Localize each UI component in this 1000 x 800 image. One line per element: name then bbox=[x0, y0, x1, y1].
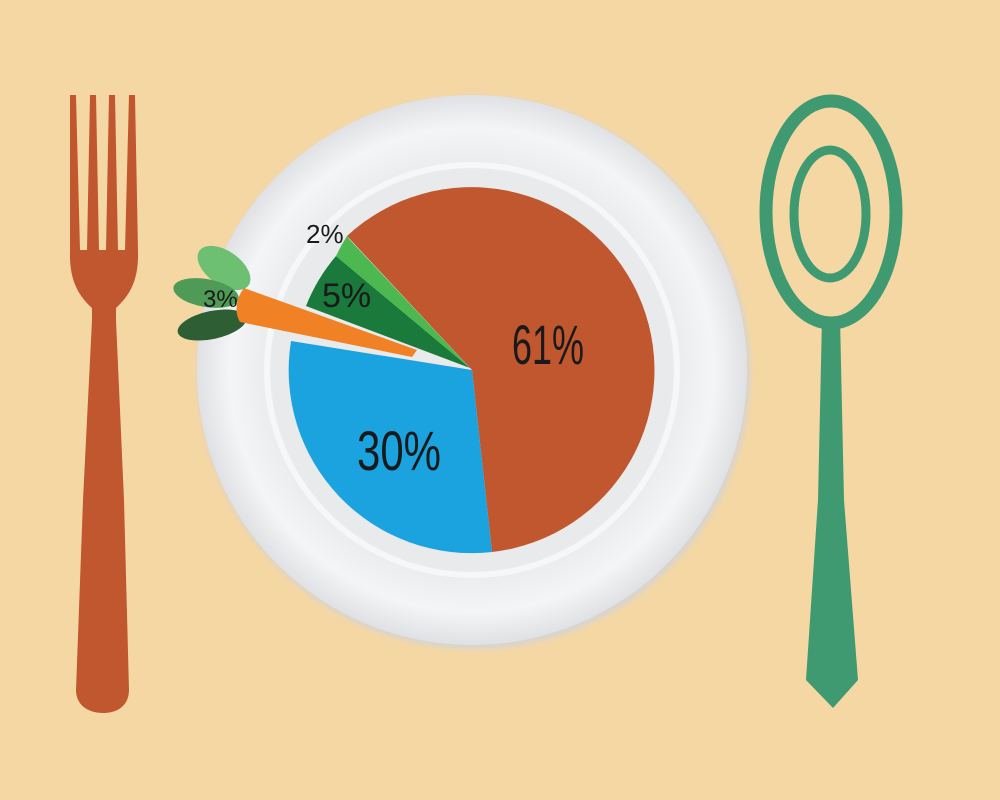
slice: 2% bbox=[336, 236, 470, 368]
carrot slice: 3% bbox=[171, 237, 417, 357]
slice: 61% bbox=[347, 187, 654, 552]
label: 61%: 61% bbox=[512, 313, 584, 376]
slice: 30% bbox=[289, 341, 492, 553]
label: 3%: 3% bbox=[203, 286, 238, 313]
slice: 5% bbox=[306, 256, 470, 368]
pie chart bbox=[289, 187, 654, 553]
label: 2%: 2% bbox=[306, 219, 344, 249]
spoon bbox=[766, 101, 896, 708]
label: 30%: 30% bbox=[357, 419, 441, 482]
fork bbox=[70, 95, 138, 713]
label: 5%: 5% bbox=[322, 277, 371, 315]
plate bbox=[197, 95, 750, 649]
